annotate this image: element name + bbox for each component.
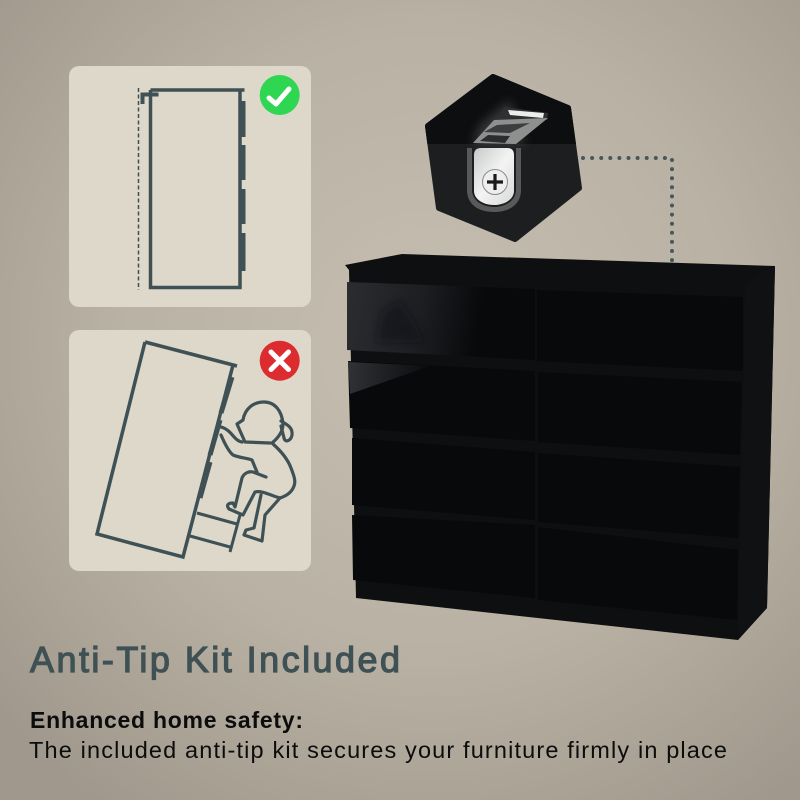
icon: red cross badge — [260, 341, 300, 381]
panel: correct installation — [69, 66, 311, 307]
panel: incorrect, child climbing — [69, 330, 311, 571]
icon: tipping dresser — [97, 342, 240, 557]
title: Anti-Tip Kit Included — [30, 639, 400, 680]
body text: The included anti-tip kit secures your furniture firmly in place — [29, 737, 727, 763]
dresser — [345, 254, 775, 640]
drawer fronts — [347, 282, 743, 620]
connector: dotted line from bracket to dresser — [583, 158, 672, 262]
subheading: Enhanced home safety: — [30, 707, 303, 733]
icon: anchored dresser side view — [138, 88, 244, 290]
icon: climbing child — [221, 402, 295, 541]
icon: green check badge — [260, 75, 300, 115]
gloss reflections — [348, 300, 430, 394]
hexagon callout: wall bracket close-up — [428, 77, 579, 239]
bracket metal — [467, 107, 548, 212]
